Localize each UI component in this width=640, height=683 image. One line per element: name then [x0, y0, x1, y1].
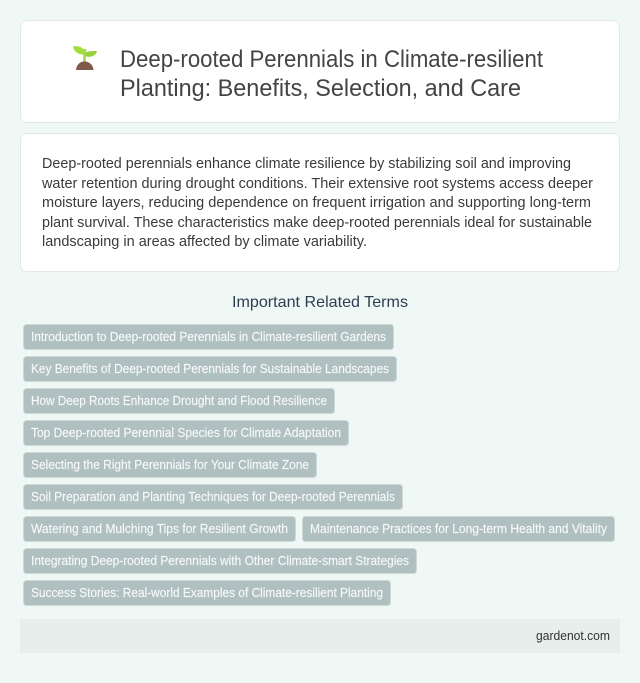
footer: source — [20, 619, 620, 653]
title: Deep-rooted Perennials in Climate-resilient — [120, 46, 543, 73]
tag: success stories — [24, 580, 390, 606]
tag: key benefits: Key Benefits of Deep-rooted Perennials for Sustainable Landscapes — [31, 362, 389, 376]
footer: source: gardenot.com — [536, 629, 610, 643]
tag: watering and mulching — [24, 516, 296, 542]
tag: integrating strategies — [24, 548, 416, 574]
tag: maintenance practices: Maintenance Practices for Long-term Health and Vitality — [310, 522, 608, 536]
tag: watering and mulching: Watering and Mulching Tips for Resilient Growth — [31, 522, 288, 536]
panel: summary paragraph: moisture layers, reducing dependence on frequent irrigation and supporting long-term — [42, 195, 591, 211]
heading: important related terms: Important Related Terms — [232, 294, 408, 311]
panel: summary paragraph: landscaping in areas affected by climate variability. — [42, 234, 367, 250]
tag: top species — [24, 420, 348, 446]
tag: soil preparation — [24, 484, 402, 510]
title: Planting: Benefits, Selection, and Care — [120, 75, 521, 102]
tag: maintenance practices — [302, 516, 614, 542]
tag: selecting perennials — [24, 452, 316, 478]
tag: key benefits — [24, 356, 396, 382]
panel: summary paragraph: plant survival. These characteristics make deep-rooted perennials ideal for sustainable — [42, 215, 592, 231]
panel: title card — [20, 20, 620, 122]
tag: introduction — [24, 324, 394, 350]
panel: summary paragraph: Deep-rooted perennials enhance climate resilience by stabilizing soil and improving — [42, 156, 571, 172]
tag: selecting perennials: Selecting the Right Perennials for Your Climate Zone — [31, 458, 309, 472]
tag: drought and flood resilience — [24, 388, 334, 414]
tag: soil preparation: Soil Preparation and Planting Techniques for Deep-rooted Perennials — [31, 490, 395, 504]
panel: related term tags — [24, 324, 614, 606]
tag: top species: Top Deep-rooted Perennial Species for Climate Adaptation — [31, 426, 341, 440]
panel: summary paragraph: water retention during drought conditions. Their extensive root systems access deeper — [41, 176, 593, 192]
tag: drought and flood resilience: How Deep Roots Enhance Drought and Flood Resilience — [31, 394, 327, 408]
tag: integrating strategies: Integrating Deep-rooted Perennials with Other Climate-smart Strategies — [31, 554, 409, 568]
panel: summary paragraph — [20, 134, 620, 272]
title — [120, 46, 543, 102]
tag: success stories: Success Stories: Real-world Examples of Climate-resilient Planting — [31, 586, 383, 600]
icon: seedling — [73, 46, 97, 70]
tag: introduction: Introduction to Deep-rooted Perennials in Climate-resilient Gardens — [31, 330, 386, 344]
